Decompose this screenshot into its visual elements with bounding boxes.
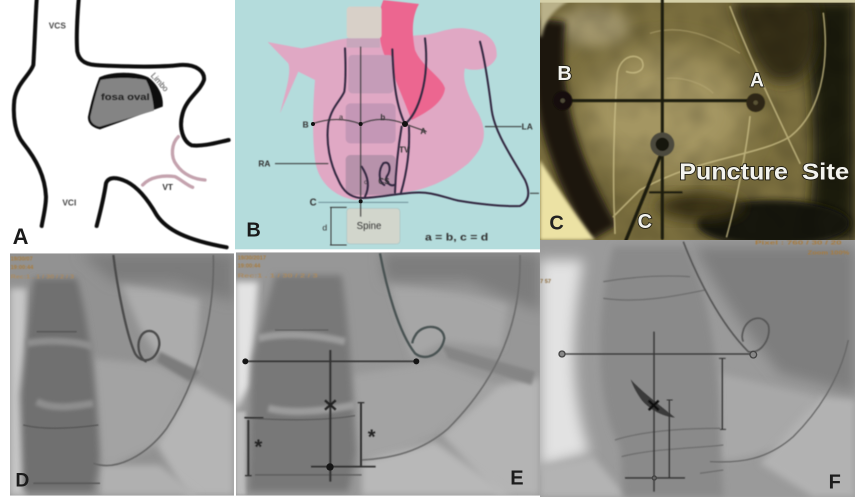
overlay text: 7 57 — [540, 279, 551, 285]
asterisks — [254, 428, 376, 448]
contrast stain — [631, 379, 675, 418]
dark lower band — [697, 200, 850, 247]
labels — [258, 112, 533, 243]
marker labels: Site — [802, 159, 849, 185]
panel letter B: B — [246, 220, 261, 242]
overlay text — [238, 256, 318, 279]
labels: A — [420, 127, 426, 136]
asterisks: * — [368, 426, 376, 448]
bright centre — [583, 50, 750, 177]
overlay text — [11, 256, 74, 280]
aorta in magenta — [379, 0, 445, 120]
guide catheter, coil and heart border — [683, 242, 848, 462]
asterisks: * — [254, 436, 262, 458]
marker labels — [557, 63, 849, 233]
bright left side — [540, 260, 590, 467]
panel letter C: C — [549, 212, 564, 234]
catheter and chamber outlines — [328, 38, 528, 206]
marker labels: C — [638, 211, 652, 233]
guide catheter and coil — [362, 253, 520, 460]
marker labels: B — [557, 63, 572, 85]
label: VCI: VCI — [62, 197, 76, 207]
labels: a — [339, 112, 344, 121]
markers A, B and puncture point — [553, 91, 765, 156]
label: VCS: VCS — [49, 20, 66, 30]
label: limbo: Limbo — [149, 71, 170, 94]
dark right vignette — [793, 0, 855, 240]
labels: C — [310, 197, 317, 208]
panel B: fluoroscopy landmark diagram — [235, 0, 542, 249]
label: fosa oval: fosa oval — [101, 92, 150, 102]
panel D: baseline fluoroscopy — [10, 253, 234, 496]
pale catheter traces — [613, 7, 825, 237]
labels: LA — [522, 122, 533, 132]
labels: CS — [378, 177, 390, 186]
labels: RA — [258, 159, 270, 169]
labels: TV — [399, 145, 410, 155]
markers — [311, 121, 408, 203]
labels: b — [380, 113, 385, 122]
spine — [248, 275, 357, 492]
label: VT: VT — [162, 182, 173, 192]
overlay text: 19:00:44 — [11, 265, 34, 271]
panel letter D: D — [15, 471, 29, 492]
dark left arc — [548, 20, 603, 233]
overlay text: Pixel : 760 / 30 / 20 — [755, 241, 842, 247]
panel letter A: A — [13, 224, 29, 249]
panel letter E: E — [510, 467, 524, 489]
panel E: annotated fluoroscopy — [235, 252, 540, 496]
mottled texture — [540, 0, 855, 240]
overlay text: Rec:1 . 1 / 30 / 2 / 3 — [11, 274, 74, 280]
overlay text: Zoom 100% — [808, 251, 849, 257]
bright lower-left corner — [540, 160, 595, 240]
markers — [242, 358, 419, 471]
panel letter F: F — [829, 471, 841, 493]
overlay text: 19:00:44 — [238, 264, 261, 270]
labels: c — [364, 179, 368, 186]
panel F: fluoroscopy with contrast stain — [540, 240, 855, 497]
marker labels: Puncture — [679, 159, 788, 185]
overlay text: 19/30/2017 — [238, 256, 266, 262]
panel A: right atrium schematic — [0, 0, 235, 253]
labels: B — [303, 119, 309, 129]
valve tract VT in pink — [143, 137, 205, 187]
right atrium outline — [14, 0, 229, 247]
labels: a = b, c = d — [425, 232, 488, 243]
measurement lines — [275, 47, 539, 245]
panel C: fluoroscopy with puncture site — [540, 0, 855, 247]
marker labels: A — [750, 71, 764, 92]
overlay text: 19/30/07 — [11, 256, 33, 262]
fossa ovalis — [88, 73, 163, 129]
spine vertebrae — [346, 7, 400, 244]
endpoint markers — [559, 351, 757, 480]
measurement lines — [562, 332, 753, 492]
overlay text — [540, 241, 849, 285]
overlay text: Rec:1 . 1 / 30 / 2 / 3 — [238, 273, 318, 279]
crosshair lines — [563, 0, 757, 240]
labels: d — [322, 223, 327, 233]
heart silhouette — [268, 28, 497, 200]
labels: Spine — [357, 221, 381, 232]
measurement lines — [244, 350, 417, 482]
spine — [600, 247, 723, 497]
guide catheter and coil — [93, 255, 213, 465]
spine — [20, 278, 100, 492]
lighter heart regions — [93, 358, 190, 465]
